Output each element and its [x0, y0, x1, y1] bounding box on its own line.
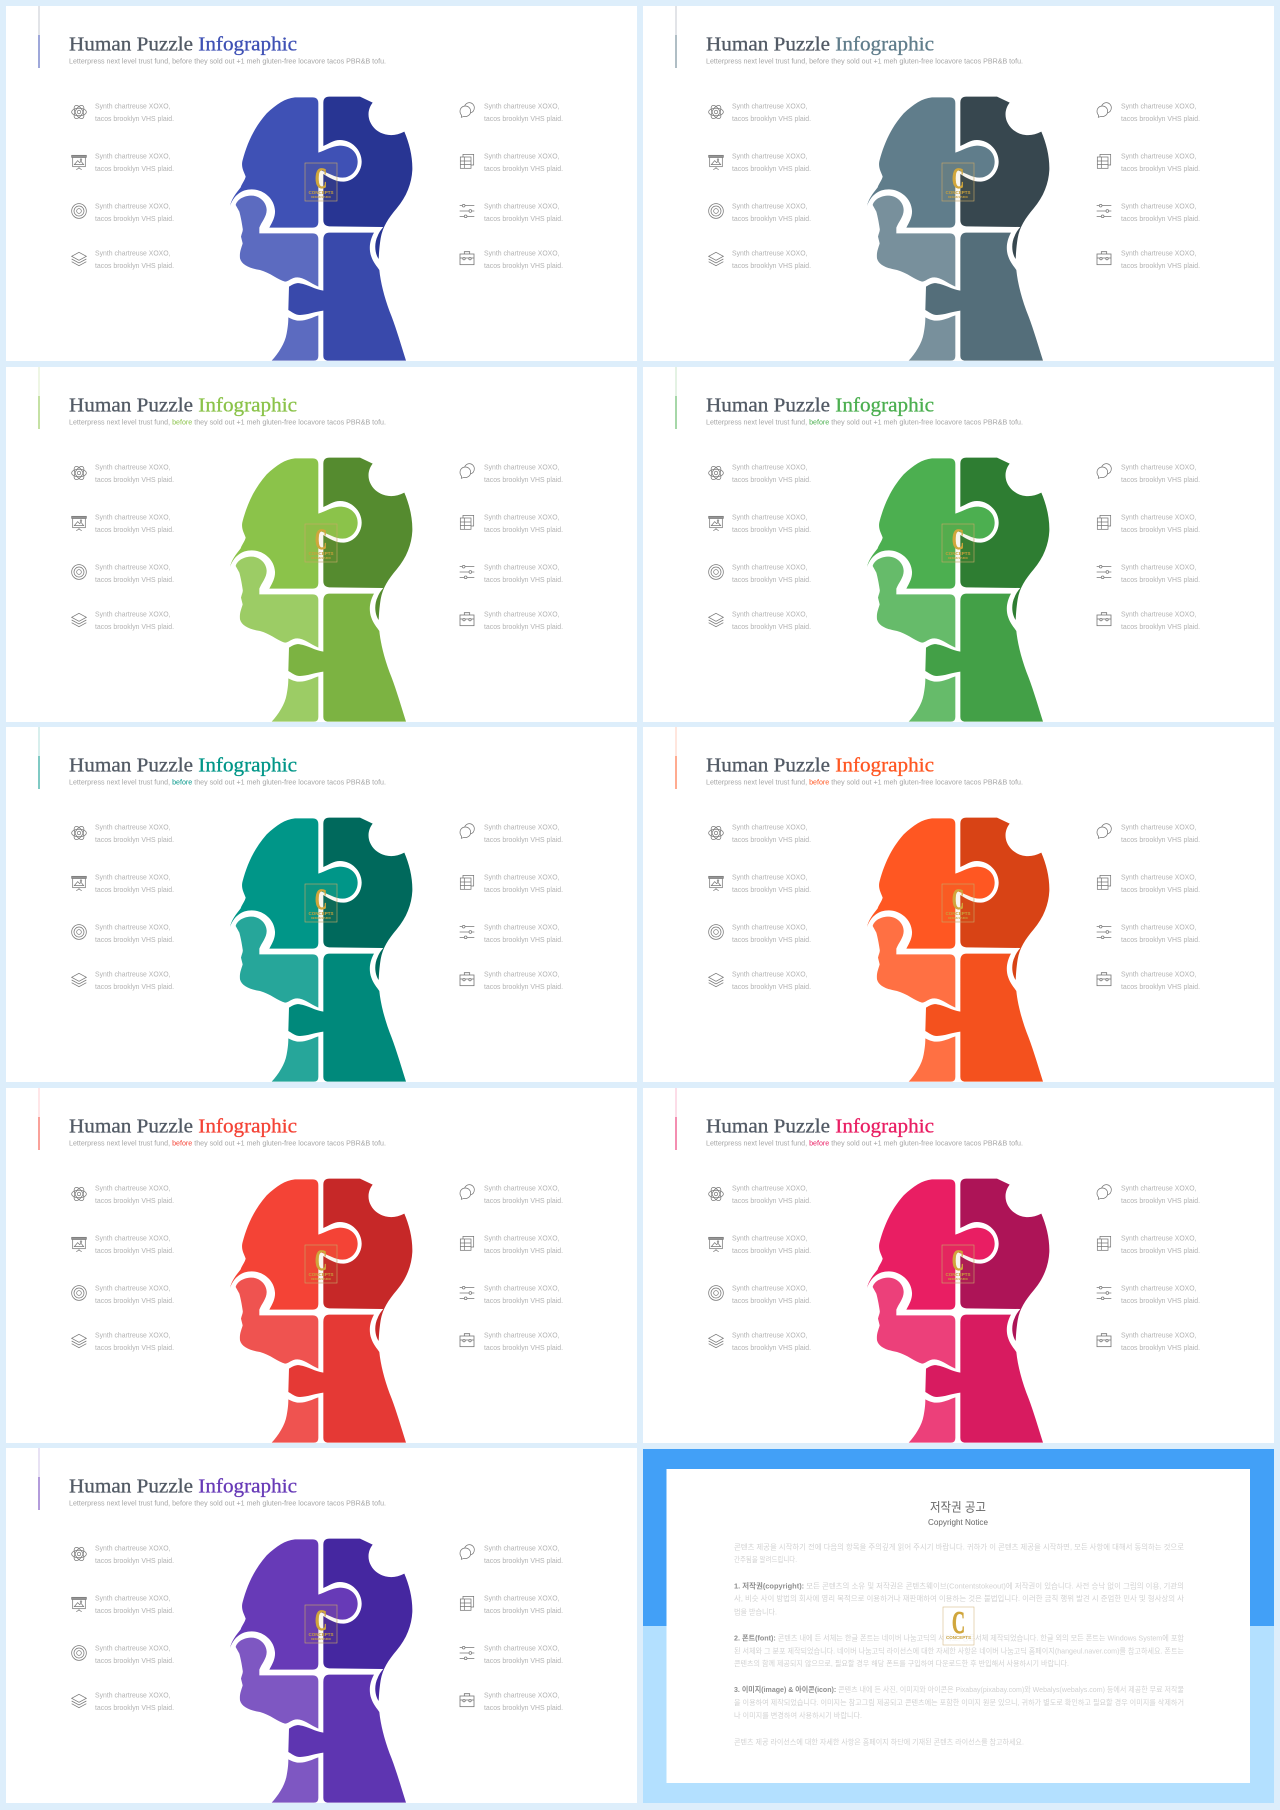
right item 1: Synth chartreuse XOXO, — [1121, 462, 1196, 472]
left item 3: tacos brooklyn VHS plaid. — [732, 575, 811, 584]
right item 3: tacos brooklyn VHS plaid. — [484, 214, 563, 223]
left item 3: Synth chartreuse XOXO, — [95, 202, 170, 210]
left item 4: Synth chartreuse XOXO, — [95, 970, 170, 978]
two-tone blue frame — [643, 1449, 1274, 1803]
right item 4: tacos brooklyn VHS plaid. — [484, 622, 563, 631]
right item 2 — [460, 512, 563, 534]
left item 4: tacos brooklyn VHS plaid. — [95, 622, 174, 631]
notice subheading: Copyright Notice — [928, 1518, 989, 1527]
notice body text: 간주됨을 알려드립니다. — [734, 1554, 797, 1564]
notice body text: 법을 받습니다. — [734, 1606, 777, 1616]
left item 4: tacos brooklyn VHS plaid. — [95, 1343, 174, 1352]
title: Human Puzzle Infographic — [706, 1116, 934, 1138]
left item 2: Synth chartreuse XOXO, — [95, 1234, 170, 1242]
right item 1 — [1097, 822, 1200, 844]
left item 4: tacos brooklyn VHS plaid. — [732, 622, 811, 631]
subtitle: Letterpress next level trust fund, before they sold out +1 meh gluten-free locavore tacos PBR&B tofu. — [69, 1498, 386, 1508]
left item 3: tacos brooklyn VHS plaid. — [732, 1296, 811, 1305]
panel: blue grey puzzle head — [643, 6, 1274, 361]
right item 4 — [460, 610, 563, 631]
right item 4: tacos brooklyn VHS plaid. — [1121, 1343, 1200, 1352]
accent bar — [676, 727, 677, 789]
right item 1: Synth chartreuse XOXO, — [484, 102, 560, 110]
left item 3: tacos brooklyn VHS plaid. — [95, 935, 174, 944]
left item 1: tacos brooklyn VHS plaid. — [732, 835, 811, 844]
left item 2 — [72, 1234, 174, 1255]
notice body text: 콘텐츠 제공 라이선스에 대한 자세한 사항은 홈페이지 하단에 기재된 콘텐츠 라이선스를 참고하세요. — [734, 1736, 1024, 1746]
right item 4: tacos brooklyn VHS plaid. — [1121, 622, 1200, 631]
right item 3: Synth chartreuse XOXO, — [484, 1644, 560, 1652]
subtitle: Letterpress next level trust fund, before they sold out +1 meh gluten-free locavore tacos PBR&B tofu. — [706, 56, 1023, 66]
right item 3 — [1097, 562, 1200, 584]
left item 3 — [72, 562, 174, 584]
right item 1: Synth chartreuse XOXO, — [1121, 1184, 1196, 1192]
right item 4: Synth chartreuse XOXO, — [484, 1330, 560, 1340]
left item 3: Synth chartreuse XOXO, — [95, 1644, 170, 1652]
accent bar — [38, 727, 40, 789]
right item 2: Synth chartreuse XOXO, — [484, 152, 560, 160]
left item 4: Synth chartreuse XOXO, — [95, 248, 170, 258]
right item 2: tacos brooklyn VHS plaid. — [1121, 525, 1200, 534]
watermark logo — [942, 162, 974, 201]
panel: purple puzzle head — [6, 1448, 637, 1803]
left item 2 — [72, 872, 174, 894]
left item 1 — [72, 462, 174, 484]
right item 1: tacos brooklyn VHS plaid. — [484, 1196, 563, 1205]
left item 4: tacos brooklyn VHS plaid. — [95, 1703, 174, 1712]
right item 3 — [460, 1284, 563, 1305]
left item 4: tacos brooklyn VHS plaid. — [732, 1343, 811, 1352]
panel: green puzzle head — [643, 367, 1274, 722]
watermark logo — [942, 883, 974, 922]
watermark logo — [943, 1604, 974, 1645]
left item 4: Synth chartreuse XOXO, — [732, 1330, 808, 1340]
right item 4: Synth chartreuse XOXO, — [1121, 610, 1196, 618]
left item 3: Synth chartreuse XOXO, — [732, 562, 808, 572]
left item 3: Synth chartreuse XOXO, — [732, 1284, 808, 1292]
right item 3: Synth chartreuse XOXO, — [1121, 202, 1196, 210]
left item 4 — [709, 970, 811, 991]
left item 4 — [72, 248, 174, 270]
right item 2 — [1097, 1234, 1200, 1255]
right item 4 — [460, 248, 563, 270]
left item 2 — [709, 1234, 811, 1255]
left item 3: tacos brooklyn VHS plaid. — [95, 1296, 174, 1305]
left item 2: tacos brooklyn VHS plaid. — [732, 525, 811, 534]
notice body text: 콘텐츠의 함께 제공되지 않으므로, 필요할 경우 해당 폰트를 구입하여 다운로드한 후 반입해서 사용하시기 바랍니다. — [734, 1658, 1069, 1668]
left item 3: Synth chartreuse XOXO, — [95, 562, 170, 572]
left item 2: tacos brooklyn VHS plaid. — [732, 164, 811, 173]
watermark logo — [305, 162, 337, 201]
left item 1 — [72, 822, 174, 844]
right item 3: Synth chartreuse XOXO, — [484, 202, 560, 210]
left item 1 — [709, 822, 811, 844]
title: Human Puzzle Infographic — [706, 394, 934, 416]
accent bar — [38, 1088, 40, 1150]
right item 1: Synth chartreuse XOXO, — [484, 1544, 560, 1552]
left item 1: tacos brooklyn VHS plaid. — [95, 475, 174, 484]
right item 2: tacos brooklyn VHS plaid. — [484, 1606, 563, 1615]
right item 4: tacos brooklyn VHS plaid. — [484, 261, 563, 270]
right item 4: Synth chartreuse XOXO, — [484, 610, 560, 618]
left item 4: tacos brooklyn VHS plaid. — [732, 261, 811, 270]
title: Human Puzzle Infographic — [69, 1116, 297, 1138]
right item 1 — [460, 462, 563, 484]
notice body text: 콘텐츠 제공을 시작하기 전에 다음의 항목을 주의깊게 읽어 주시기 바랍니다. 귀하가 이 콘텐츠 제공을 시작하면, 모든 사항에 대해서 동의하는 것으로 — [734, 1542, 1184, 1552]
panel: light green puzzle head — [6, 367, 637, 722]
subtitle: Letterpress next level trust fund, before they sold out +1 meh gluten-free locavore tacos PBR&B tofu. — [69, 778, 386, 786]
notice heading: 저작권 공고 — [930, 1500, 986, 1514]
subtitle: Letterpress next level trust fund, before they sold out +1 meh gluten-free locavore tacos PBR&B tofu. — [706, 778, 1023, 786]
right item 3 — [460, 922, 563, 944]
left item 2: tacos brooklyn VHS plaid. — [95, 1246, 174, 1255]
left item 2: tacos brooklyn VHS plaid. — [732, 885, 811, 894]
left item 1 — [709, 462, 811, 484]
accent bar — [38, 6, 40, 68]
left item 3 — [72, 922, 174, 944]
right item 3: Synth chartreuse XOXO, — [484, 562, 560, 572]
watermark logo — [305, 523, 337, 562]
watermark logo — [942, 523, 974, 562]
right item 4: tacos brooklyn VHS plaid. — [484, 1343, 563, 1352]
right item 4 — [1097, 970, 1200, 991]
left item 3: Synth chartreuse XOXO, — [95, 922, 170, 932]
left item 2: Synth chartreuse XOXO, — [732, 512, 808, 522]
left item 1: Synth chartreuse XOXO, — [95, 1184, 170, 1192]
left item 2: Synth chartreuse XOXO, — [95, 1594, 170, 1602]
left item 2 — [72, 512, 174, 534]
left item 2: Synth chartreuse XOXO, — [95, 512, 170, 522]
right item 3: tacos brooklyn VHS plaid. — [1121, 935, 1200, 944]
right item 2: Synth chartreuse XOXO, — [484, 1234, 560, 1242]
right item 3 — [1097, 1284, 1200, 1305]
right item 2: Synth chartreuse XOXO, — [1121, 1234, 1196, 1242]
left item 2: tacos brooklyn VHS plaid. — [95, 885, 174, 894]
left item 3 — [709, 922, 811, 944]
panel: copyright notice — [643, 1449, 1274, 1803]
left item 4 — [709, 248, 811, 270]
notice body text: 2. 폰트(font): 콘텐츠 내에 든 서체는 한글 폰트는 네이버 나눔고딕의 서체로, 영문서체 제작되었습니다. 한글 외의 모든 폰트는 Windows System에 포함 — [734, 1632, 1184, 1642]
left item 1: Synth chartreuse XOXO, — [95, 102, 170, 110]
notice body text: 사, 비슷 사이 방법의 회사에 영리 목적으로 이용하거나 재판매하여 이용하는 것은 불법입니다. 이러한 금칙 행위 발견 시 준엄한 민사 및 형사상의 사 — [734, 1593, 1184, 1603]
right item 3: tacos brooklyn VHS plaid. — [484, 575, 563, 584]
right item 4 — [460, 1330, 563, 1352]
left item 2: Synth chartreuse XOXO, — [732, 152, 808, 160]
left item 3 — [709, 1284, 811, 1305]
left item 2 — [709, 872, 811, 894]
title: Human Puzzle Infographic — [69, 1476, 297, 1498]
left item 4 — [709, 610, 811, 631]
right item 3 — [1097, 922, 1200, 944]
right item 3: tacos brooklyn VHS plaid. — [1121, 214, 1200, 223]
right item 2: tacos brooklyn VHS plaid. — [484, 885, 563, 894]
right item 1: tacos brooklyn VHS plaid. — [484, 1556, 563, 1565]
right item 2: tacos brooklyn VHS plaid. — [484, 164, 563, 173]
left item 1: tacos brooklyn VHS plaid. — [732, 114, 811, 123]
subtitle: Letterpress next level trust fund, before they sold out +1 meh gluten-free locavore tacos PBR&B tofu. — [69, 418, 386, 426]
left item 1: tacos brooklyn VHS plaid. — [732, 1196, 811, 1205]
right item 1: tacos brooklyn VHS plaid. — [484, 114, 563, 123]
title: Human Puzzle Infographic — [706, 754, 934, 776]
notice body text: 나 이미지를 변경하여 사용하시기 바랍니다. — [734, 1710, 862, 1720]
right item 1: tacos brooklyn VHS plaid. — [1121, 475, 1200, 484]
right item 4: tacos brooklyn VHS plaid. — [1121, 982, 1200, 991]
right item 3 — [1097, 202, 1200, 223]
right item 2 — [460, 152, 563, 173]
right item 1 — [460, 1544, 563, 1565]
left item 2: tacos brooklyn VHS plaid. — [95, 525, 174, 534]
puzzle head — [230, 1179, 412, 1443]
left item 4: Synth chartreuse XOXO, — [732, 248, 808, 258]
right item 3: Synth chartreuse XOXO, — [1121, 562, 1196, 572]
puzzle head — [230, 97, 412, 361]
right item 2: Synth chartreuse XOXO, — [1121, 152, 1196, 160]
left item 3: tacos brooklyn VHS plaid. — [95, 575, 174, 584]
puzzle head — [867, 818, 1049, 1082]
right item 3: Synth chartreuse XOXO, — [484, 1284, 560, 1292]
right item 1: Synth chartreuse XOXO, — [1121, 822, 1196, 832]
right item 3: tacos brooklyn VHS plaid. — [1121, 575, 1200, 584]
right item 3: tacos brooklyn VHS plaid. — [484, 1296, 563, 1305]
panel: teal puzzle head — [6, 727, 637, 1082]
left item 4: tacos brooklyn VHS plaid. — [95, 261, 174, 270]
left item 1: tacos brooklyn VHS plaid. — [95, 114, 174, 123]
right item 3: Synth chartreuse XOXO, — [484, 922, 560, 932]
right item 2 — [460, 1594, 563, 1615]
right item 1: Synth chartreuse XOXO, — [484, 1184, 560, 1192]
left item 3 — [709, 562, 811, 584]
left item 3: tacos brooklyn VHS plaid. — [95, 1656, 174, 1665]
accent bar — [676, 6, 677, 68]
right item 4: tacos brooklyn VHS plaid. — [484, 1703, 563, 1712]
right item 1 — [1097, 102, 1200, 123]
left item 4 — [72, 970, 174, 991]
right item 1: Synth chartreuse XOXO, — [1121, 102, 1196, 110]
right item 2: Synth chartreuse XOXO, — [484, 872, 560, 882]
panel: pink puzzle head — [643, 1088, 1274, 1443]
right item 1: Synth chartreuse XOXO, — [484, 462, 560, 472]
left item 2: Synth chartreuse XOXO, — [732, 872, 808, 882]
right item 2: tacos brooklyn VHS plaid. — [1121, 885, 1200, 894]
left item 1: tacos brooklyn VHS plaid. — [732, 475, 811, 484]
puzzle head — [867, 97, 1049, 361]
left item 1 — [72, 102, 174, 123]
right item 1 — [1097, 1184, 1200, 1205]
left item 4 — [72, 1330, 174, 1352]
left item 4: Synth chartreuse XOXO, — [732, 610, 808, 618]
title: Human Puzzle Infographic — [706, 34, 934, 56]
left item 1: Synth chartreuse XOXO, — [95, 822, 170, 832]
puzzle head — [230, 1539, 412, 1803]
right item 1: tacos brooklyn VHS plaid. — [484, 475, 563, 484]
right item 2: Synth chartreuse XOXO, — [484, 512, 560, 522]
left item 3 — [72, 1644, 174, 1665]
right item 3: tacos brooklyn VHS plaid. — [484, 935, 563, 944]
right item 4 — [1097, 248, 1200, 270]
left item 2 — [709, 152, 811, 173]
white notice sheet — [666, 1469, 1250, 1783]
right item 1: Synth chartreuse XOXO, — [484, 822, 560, 832]
right item 1 — [460, 102, 563, 123]
left item 3 — [72, 202, 174, 223]
left item 2: tacos brooklyn VHS plaid. — [95, 164, 174, 173]
watermark logo — [305, 883, 337, 922]
right item 2: Synth chartreuse XOXO, — [1121, 872, 1196, 882]
right item 1 — [1097, 462, 1200, 484]
right item 1: tacos brooklyn VHS plaid. — [1121, 835, 1200, 844]
right item 2 — [460, 1234, 563, 1255]
watermark logo — [305, 1604, 337, 1643]
left item 1 — [72, 1184, 174, 1205]
subtitle: Letterpress next level trust fund, before they sold out +1 meh gluten-free locavore tacos PBR&B tofu. — [706, 1138, 1023, 1148]
right item 1 — [460, 822, 563, 844]
left item 1: Synth chartreuse XOXO, — [732, 822, 808, 832]
right item 2 — [1097, 152, 1200, 173]
left item 4 — [72, 610, 174, 631]
left item 4: tacos brooklyn VHS plaid. — [95, 982, 174, 991]
right item 3 — [460, 1644, 563, 1665]
title: Human Puzzle Infographic — [69, 394, 297, 416]
right item 4: tacos brooklyn VHS plaid. — [484, 982, 563, 991]
right item 4 — [460, 1690, 563, 1712]
right item 3: tacos brooklyn VHS plaid. — [1121, 1296, 1200, 1305]
accent bar — [38, 1448, 40, 1510]
left item 1: tacos brooklyn VHS plaid. — [95, 1556, 174, 1565]
left item 3: Synth chartreuse XOXO, — [95, 1284, 170, 1292]
left item 1 — [72, 1544, 174, 1565]
left item 2: Synth chartreuse XOXO, — [95, 152, 170, 160]
left item 1: Synth chartreuse XOXO, — [732, 462, 808, 472]
right item 2: Synth chartreuse XOXO, — [1121, 512, 1196, 522]
accent bar — [676, 1088, 677, 1150]
right item 1: tacos brooklyn VHS plaid. — [484, 835, 563, 844]
notice body text: 을 이용하여 제작되었습니다. 이미지는 참고그림 제공되고 콘텐츠에는 포함한 이미지 원문 있으니, 귀하가 별도로 확인하고 필요할 경우 이미지를 삭제하거 — [734, 1697, 1184, 1707]
right item 1: tacos brooklyn VHS plaid. — [1121, 1196, 1200, 1205]
right item 4 — [1097, 610, 1200, 631]
right item 3 — [460, 562, 563, 584]
notice body text: 된 서체와 그 분포 제작되었습니다. 네이버 나눔고딕 라이선스에 대한 자세한 사항은 네이버 나눔고딕 홈페이지(hangeul.naver.com)를 참고하세요. 폰트는 — [734, 1646, 1184, 1656]
left item 1: Synth chartreuse XOXO, — [732, 1184, 808, 1192]
right item 4: Synth chartreuse XOXO, — [484, 1690, 560, 1700]
left item 4 — [709, 1330, 811, 1352]
puzzle head — [867, 458, 1049, 722]
right item 2 — [1097, 872, 1200, 894]
right item 4: Synth chartreuse XOXO, — [484, 248, 560, 258]
left item 1: Synth chartreuse XOXO, — [732, 102, 808, 110]
panel: orange puzzle head — [643, 727, 1274, 1082]
right item 3 — [460, 202, 563, 223]
left item 2: tacos brooklyn VHS plaid. — [95, 1606, 174, 1615]
left item 4: tacos brooklyn VHS plaid. — [732, 982, 811, 991]
watermark logo — [305, 1244, 337, 1283]
left item 2 — [709, 512, 811, 534]
notice body text: 1. 저작권(copyright): 모든 콘텐츠의 소유 및 저작권은 콘텐츠웨이브(Contentstokeout)에 저작권이 있습니다. 사전 승낙 없이 그림의 이용, 기관의 — [734, 1580, 1184, 1590]
right item 1 — [460, 1184, 563, 1205]
left item 3 — [709, 202, 811, 223]
left item 4: Synth chartreuse XOXO, — [95, 610, 170, 618]
right item 4: Synth chartreuse XOXO, — [1121, 1330, 1196, 1340]
subtitle: Letterpress next level trust fund, before they sold out +1 meh gluten-free locavore tacos PBR&B tofu. — [69, 56, 386, 66]
accent bar — [38, 367, 40, 429]
right item 2 — [1097, 512, 1200, 534]
right item 3: tacos brooklyn VHS plaid. — [484, 1656, 563, 1665]
right item 4 — [1097, 1330, 1200, 1352]
watermark logo: C — [952, 1604, 965, 1640]
right item 3: Synth chartreuse XOXO, — [1121, 922, 1196, 932]
subtitle: Letterpress next level trust fund, before they sold out +1 meh gluten-free locavore tacos PBR&B tofu. — [706, 418, 1023, 426]
panel: red puzzle head — [6, 1088, 637, 1443]
right item 2: tacos brooklyn VHS plaid. — [484, 525, 563, 534]
right item 4 — [460, 970, 563, 991]
left item 4 — [72, 1690, 174, 1712]
notice body text: 3. 이미지(image) & 아이콘(icon): 콘텐츠 내에 든 사진, 이미지와 아이콘은 Pixabay(pixabay.com)와 Webalys(webalys.com) 등에서 제공한 무료 저작물 — [734, 1684, 1184, 1694]
right item 4: Synth chartreuse XOXO, — [484, 970, 560, 978]
left item 1: tacos brooklyn VHS plaid. — [95, 835, 174, 844]
watermark logo — [942, 1244, 974, 1283]
left item 1: Synth chartreuse XOXO, — [95, 1544, 170, 1552]
left item 3 — [72, 1284, 174, 1305]
title: Human Puzzle Infographic — [69, 754, 297, 776]
right item 1: tacos brooklyn VHS plaid. — [1121, 114, 1200, 123]
right item 2: Synth chartreuse XOXO, — [484, 1594, 560, 1602]
left item 4: Synth chartreuse XOXO, — [732, 970, 808, 978]
left item 2: tacos brooklyn VHS plaid. — [732, 1246, 811, 1255]
left item 4: Synth chartreuse XOXO, — [95, 1330, 170, 1340]
panel: indigo puzzle head — [6, 6, 637, 361]
title: Human Puzzle Infographic — [69, 34, 297, 56]
left item 3: tacos brooklyn VHS plaid. — [95, 214, 174, 223]
right item 2: tacos brooklyn VHS plaid. — [1121, 1246, 1200, 1255]
left item 3: tacos brooklyn VHS plaid. — [732, 214, 811, 223]
right item 2: tacos brooklyn VHS plaid. — [1121, 164, 1200, 173]
left item 3: Synth chartreuse XOXO, — [732, 202, 808, 210]
left item 1 — [709, 102, 811, 123]
right item 4: tacos brooklyn VHS plaid. — [1121, 261, 1200, 270]
left item 2 — [72, 1594, 174, 1615]
right item 4: Synth chartreuse XOXO, — [1121, 248, 1196, 258]
puzzle head — [230, 458, 412, 722]
left item 4: Synth chartreuse XOXO, — [95, 1690, 170, 1700]
left item 2: Synth chartreuse XOXO, — [95, 872, 170, 882]
left item 1: tacos brooklyn VHS plaid. — [95, 1196, 174, 1205]
left item 3: tacos brooklyn VHS plaid. — [732, 935, 811, 944]
puzzle head — [230, 818, 412, 1082]
subtitle: Letterpress next level trust fund, before they sold out +1 meh gluten-free locavore tacos PBR&B tofu. — [69, 1138, 386, 1148]
right item 2: tacos brooklyn VHS plaid. — [484, 1246, 563, 1255]
left item 2 — [72, 152, 174, 173]
right item 2 — [460, 872, 563, 894]
right item 4: Synth chartreuse XOXO, — [1121, 970, 1196, 978]
left item 3: Synth chartreuse XOXO, — [732, 922, 808, 932]
notice body text — [734, 1542, 1184, 1746]
left item 1 — [709, 1184, 811, 1205]
left item 1: Synth chartreuse XOXO, — [95, 462, 170, 472]
accent bar — [676, 367, 677, 429]
puzzle head — [867, 1179, 1049, 1443]
watermark logo: CONCEPTS — [946, 1635, 971, 1640]
right item 3: Synth chartreuse XOXO, — [1121, 1284, 1196, 1292]
left item 2: Synth chartreuse XOXO, — [732, 1234, 808, 1242]
